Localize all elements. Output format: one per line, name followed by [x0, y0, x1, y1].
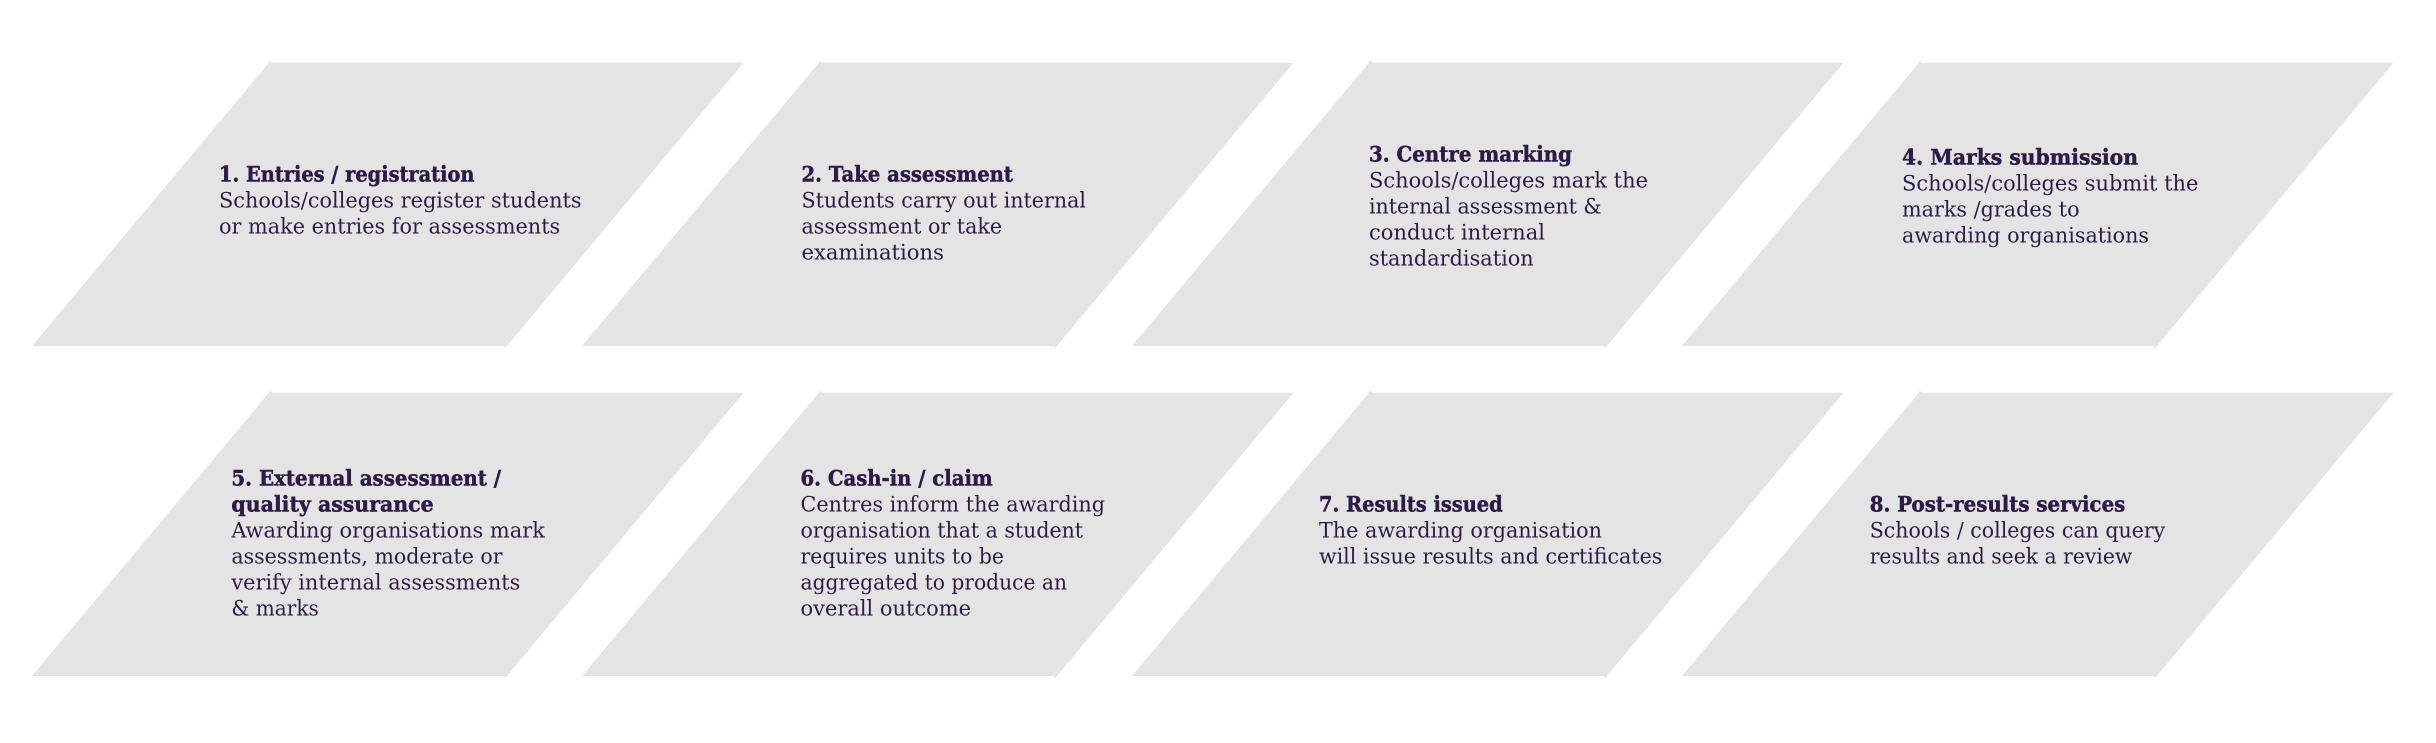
body text 4	[1902, 172, 2198, 248]
body text 2	[802, 188, 1086, 266]
parallelogram 5	[32, 390, 744, 678]
body text 6: requires units to be	[800, 545, 1004, 570]
heading 5: 5. External assessment /	[231, 467, 501, 492]
heading 8: 8. Post-results services	[1870, 493, 2125, 518]
body text 5: assessments, moderate or	[231, 545, 503, 570]
body text 6: organisation that a student	[800, 519, 1083, 544]
body text 4: marks /grades to	[1902, 198, 2080, 222]
body text 5: verify internal assessments	[230, 571, 520, 596]
body text 1: or make entries for assessments	[219, 214, 560, 240]
parallelogram 8	[1682, 390, 2394, 678]
body text 4: Schools/colleges submit the	[1902, 172, 2198, 196]
parallelogram 6	[582, 390, 1294, 678]
heading 2: 2. Take assessment	[802, 163, 1013, 188]
panel: step 1 entries / registration	[32, 60, 744, 348]
heading 5: quality assurance	[231, 493, 434, 518]
body text 3: internal assessment &	[1369, 194, 1602, 220]
heading 3: 3. Centre marking	[1369, 143, 1572, 168]
body text 1: Schools/colleges register students	[219, 188, 582, 214]
body text 1	[219, 188, 582, 240]
panel: step 2 take assessment	[582, 60, 1294, 348]
parallelogram 1	[32, 60, 744, 348]
body text 8	[1870, 519, 2166, 570]
body text 3: Schools/colleges mark the	[1369, 168, 1648, 194]
parallelogram 7	[1132, 390, 1844, 678]
parallelogram 4	[1682, 60, 2394, 348]
heading 4: 4. Marks submission	[1902, 146, 2138, 170]
body text 6: aggregated to produce an	[800, 571, 1067, 596]
body text 6: Centres inform the awarding	[800, 493, 1105, 518]
parallelogram 3	[1132, 60, 1844, 348]
body text 5: & marks	[231, 597, 319, 622]
panel: step 7 results issued	[1132, 390, 1844, 678]
body text 6: overall outcome	[800, 597, 971, 622]
heading 1: 1. Entries / registration	[219, 163, 475, 188]
body text 3: standardisation	[1369, 246, 1534, 272]
body text 3	[1369, 168, 1648, 272]
body text 3: conduct internal	[1369, 220, 1545, 246]
body text 8: Schools / colleges can query	[1870, 519, 2166, 544]
heading 7: 7. Results issued	[1319, 493, 1503, 518]
body text 2: examinations	[802, 240, 944, 266]
body text 5: Awarding organisations mark	[230, 519, 546, 544]
panel: step 6 cash-in / claim	[582, 390, 1294, 678]
body text 4: awarding organisations	[1902, 224, 2149, 248]
heading 5	[231, 467, 501, 518]
body text 8: results and seek a review	[1870, 545, 2133, 570]
body text 7: will issue results and certificates	[1319, 545, 1662, 570]
panel: step 3 centre marking	[1132, 60, 1844, 348]
body text 5	[230, 519, 546, 622]
parallelogram 2	[582, 60, 1294, 348]
panel: step 8 post-results services	[1682, 390, 2394, 678]
body text 2: assessment or take	[802, 214, 1002, 240]
body text 2: Students carry out internal	[802, 188, 1086, 214]
panel: step 5 external assessment / quality assurance	[32, 390, 744, 678]
panel: step 4 marks submission	[1682, 60, 2394, 348]
body text 7: The awarding organisation	[1319, 519, 1602, 544]
body text 6	[800, 493, 1105, 622]
body text 7	[1319, 519, 1662, 570]
heading 6: 6. Cash-in / claim	[800, 467, 993, 492]
